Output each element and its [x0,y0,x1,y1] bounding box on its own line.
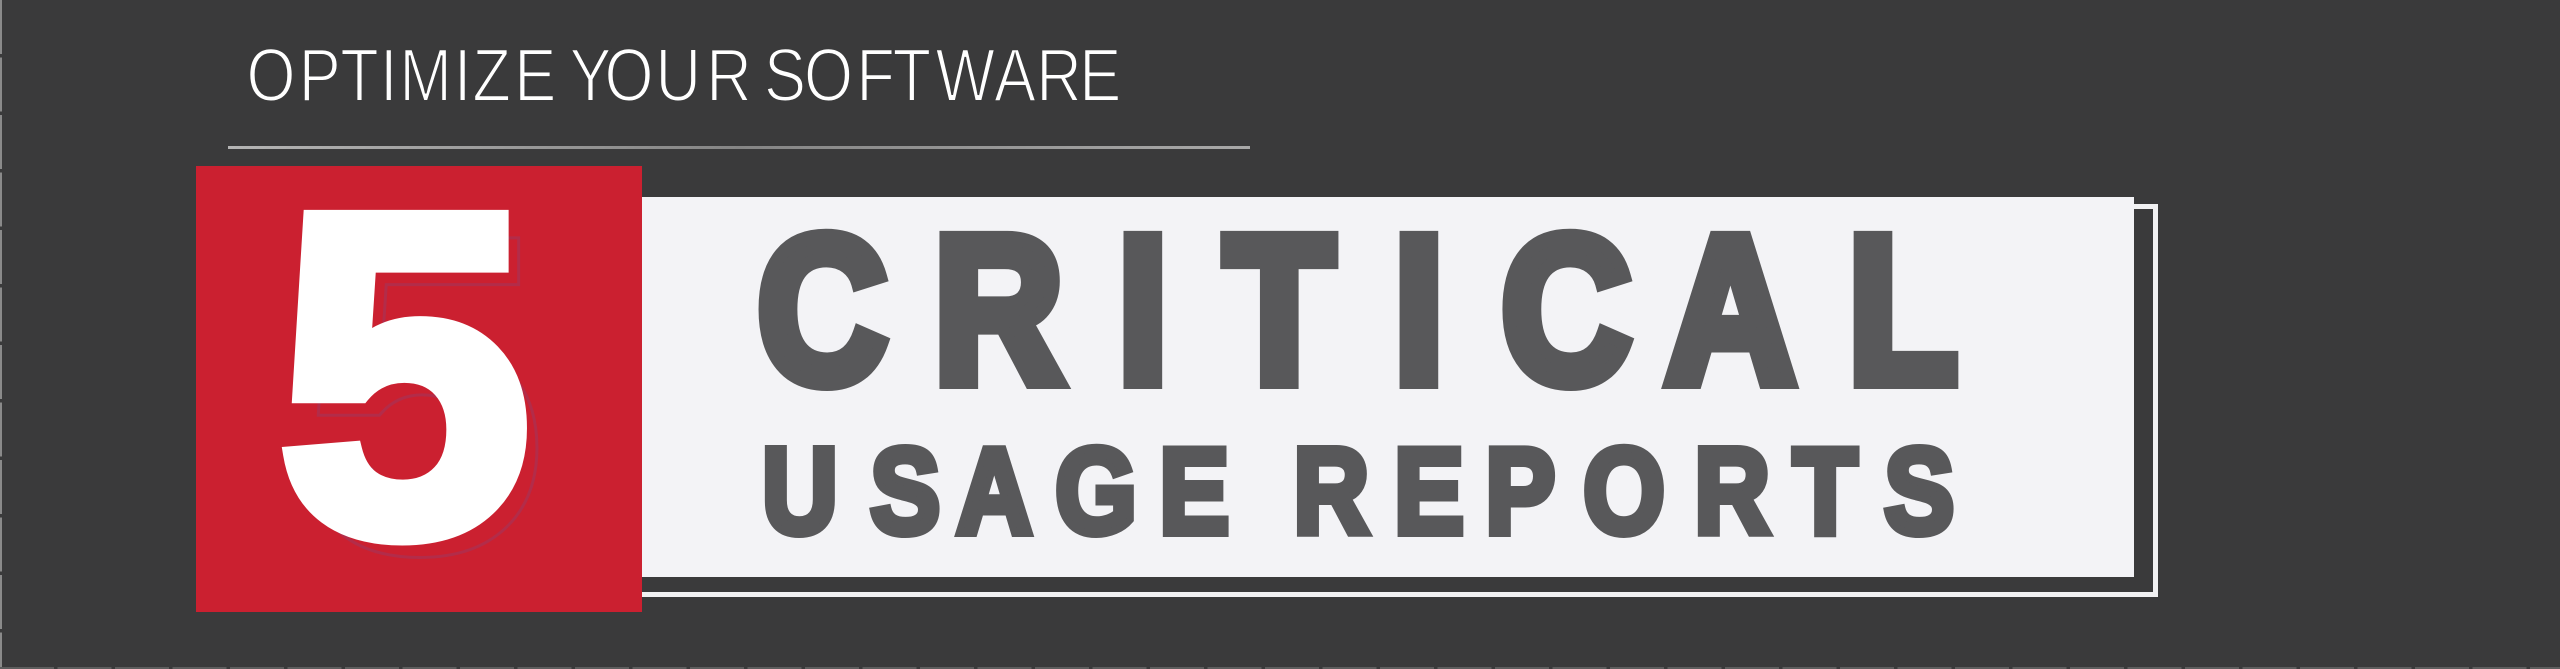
panel: red number block [196,119,642,651]
title: optimize your software: OPTIMIZE YOUR SOFTWARE [246,33,1121,117]
outlined offset frame [630,206,2156,594]
panel: headline background [642,197,2134,577]
divider rule [228,146,1250,149]
big number 5: 5 [277,119,532,631]
heading: critical: CRITICAL [758,194,1957,427]
number shadow: 5 [295,139,550,651]
heading: usage reports: USAGE REPORTS [762,424,1954,560]
